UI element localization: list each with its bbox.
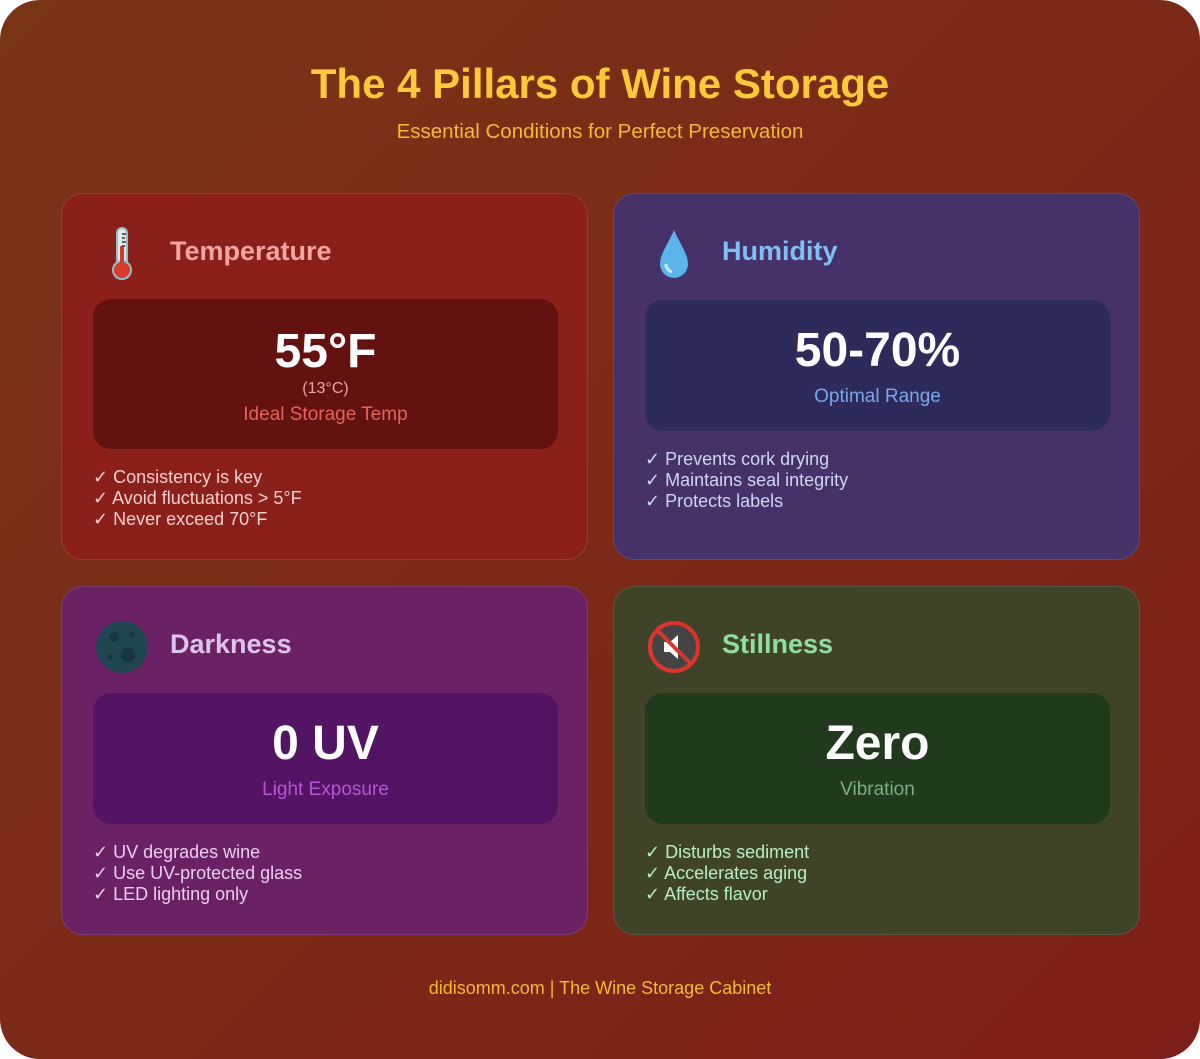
- list: [93, 842, 302, 904]
- stat box: Optimal Range: [814, 386, 941, 407]
- panel: stillness: [613, 586, 1140, 935]
- icon: new moon: [96, 621, 148, 673]
- heading: Stillness: [722, 629, 833, 659]
- list: ✓ Disturbs sediment: [645, 842, 809, 862]
- list: ✓ Prevents cork drying: [645, 449, 829, 469]
- list: ✓ Maintains seal integrity: [645, 470, 848, 490]
- icon: thermometer: [112, 227, 132, 280]
- footer: didisomm.com | The Wine Storage Cabinet: [429, 978, 771, 998]
- icon: water drop: [660, 230, 688, 278]
- list: ✓ Protects labels: [645, 491, 783, 511]
- list: ✓ LED lighting only: [93, 884, 248, 904]
- subtitle: Essential Conditions for Perfect Preservation: [397, 120, 803, 143]
- list: [645, 449, 848, 511]
- stat box: (13°C): [302, 380, 349, 397]
- stat box: 55°F: [275, 325, 376, 378]
- list: ✓ Accelerates aging: [645, 863, 807, 883]
- panel: humidity: [613, 193, 1140, 560]
- stat box: [93, 693, 558, 824]
- heading: Darkness: [170, 629, 292, 659]
- stat box: 0 UV: [272, 717, 379, 770]
- stat box: Vibration: [840, 779, 915, 800]
- list: ✓ Never exceed 70°F: [93, 509, 267, 529]
- list: ✓ Avoid fluctuations > 5°F: [93, 488, 302, 508]
- list: ✓ UV degrades wine: [93, 842, 260, 862]
- icon: muted speaker: [648, 621, 700, 673]
- list: ✓ Use UV-protected glass: [93, 863, 302, 883]
- stat box: [645, 300, 1110, 431]
- stat box: Light Exposure: [262, 779, 389, 800]
- stat box: Zero: [825, 717, 930, 770]
- panel: temperature: [61, 193, 588, 560]
- stat box: Ideal Storage Temp: [243, 404, 408, 425]
- heading: Temperature: [170, 236, 332, 266]
- list: [645, 842, 809, 904]
- list: ✓ Affects flavor: [645, 884, 768, 904]
- stat box: 50-70%: [795, 324, 960, 377]
- title: The 4 Pillars of Wine Storage: [311, 60, 889, 107]
- list: [93, 467, 302, 529]
- list: ✓ Consistency is key: [93, 467, 262, 487]
- panel: darkness: [61, 586, 588, 935]
- stat box: [93, 299, 558, 449]
- stat box: [645, 693, 1110, 824]
- heading: Humidity: [722, 236, 838, 266]
